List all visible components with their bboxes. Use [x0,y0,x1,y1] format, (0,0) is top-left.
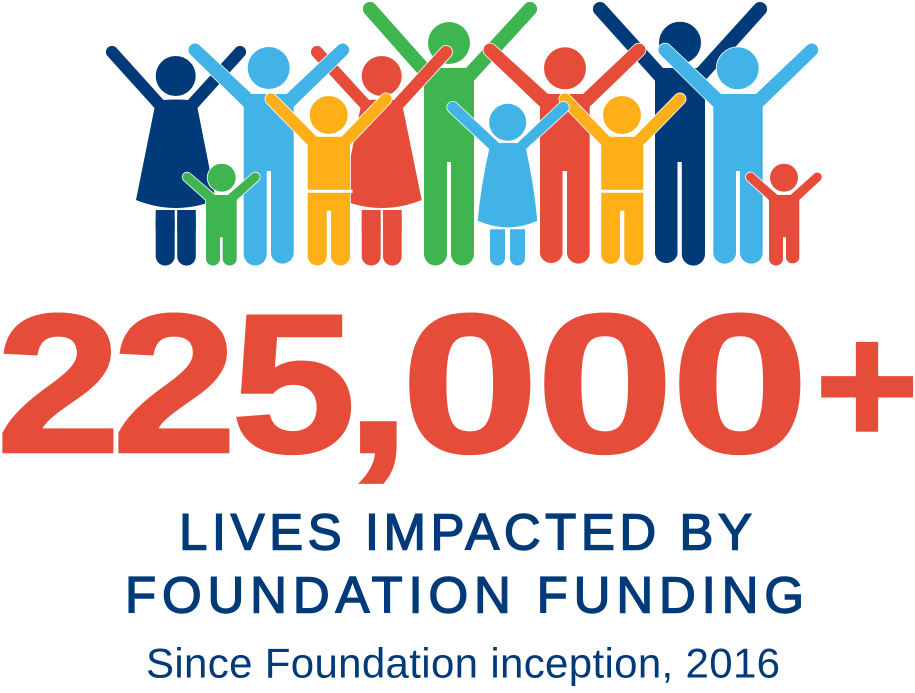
figure: green child [183,164,260,266]
figure: red child [746,164,822,266]
big number: 2 [112,273,237,494]
figure: light blue man left [188,43,349,266]
subheading: Since Foundation inception, 2016 [146,640,780,687]
figure: navy man [593,2,767,266]
big number: 5 [231,273,356,494]
big number: + [815,289,915,481]
heading line 1: LIVES IMPACTED BY [179,503,752,560]
figure: navy woman [106,46,246,266]
figure: light blue girl [447,102,569,266]
illustration: crowd of people with raised arms [106,2,822,266]
big number: 0 [536,273,674,494]
figure: red man [483,43,645,264]
figure: yellow child right [559,93,686,266]
figure: red woman [311,46,452,266]
figure: light blue man right [658,43,818,264]
figure: green man [363,2,537,266]
big number: , [345,273,411,494]
figure: yellow child left [265,93,392,266]
big number: 0 [671,273,809,494]
heading line 2: FOUNDATION FUNDING [125,567,804,624]
big number: 0 [401,273,539,494]
